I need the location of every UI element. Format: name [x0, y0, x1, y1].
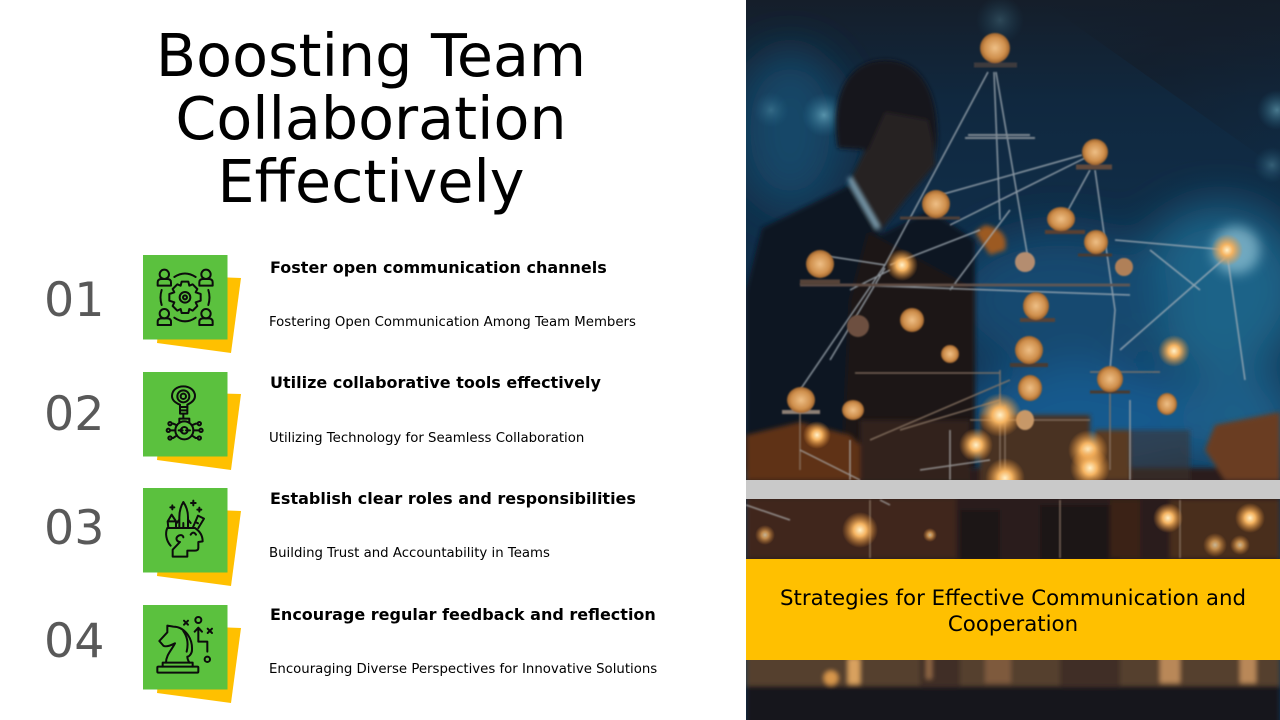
icon: creative head: [143, 488, 241, 586]
step 4 description: Encouraging Diverse Perspectives for Innovative Solutions: [269, 662, 657, 676]
background blue haze: [735, 50, 1280, 475]
bright lights: [755, 234, 1265, 557]
number 01: 01: [44, 273, 104, 328]
glass bulbs: [782, 33, 1177, 430]
lower scene warm tones: [746, 412, 1280, 563]
step 3 heading: Establish clear roles and responsibilities: [270, 489, 636, 508]
number 02: 02: [44, 387, 104, 442]
step 4 heading: Encourage regular feedback and reflection: [270, 605, 656, 624]
photo: woman with glowing network: [746, 0, 1280, 720]
title: Effectively: [217, 148, 525, 216]
icon: team gear: [143, 255, 241, 353]
step 1 heading: Foster open communication channels: [270, 258, 607, 277]
title: Collaboration: [175, 85, 567, 153]
number 03: 03: [44, 501, 104, 556]
number 04: 04: [44, 614, 104, 669]
title: [156, 22, 586, 216]
person silhouette: [746, 60, 1006, 470]
step 1 description: Fostering Open Communication Among Team Members: [269, 314, 636, 330]
title: Boosting Team: [156, 22, 586, 90]
step 2 description: Utilizing Technology for Seamless Collaboration: [269, 430, 584, 446]
step 2 heading: Utilize collaborative tools effectively: [270, 373, 601, 392]
icon: chess strategy: [143, 605, 241, 703]
bottom strip: [746, 655, 1280, 720]
callout banner: Strategies for Effective Communication and Cooperation: [780, 586, 1246, 637]
callout banner: [746, 558, 1280, 660]
icon: idea bulb and circuit: [143, 372, 241, 470]
gray strip: [746, 480, 1280, 498]
network strands: [746, 72, 1245, 558]
step 3 description: Building Trust and Accountability in Teams: [269, 546, 550, 560]
